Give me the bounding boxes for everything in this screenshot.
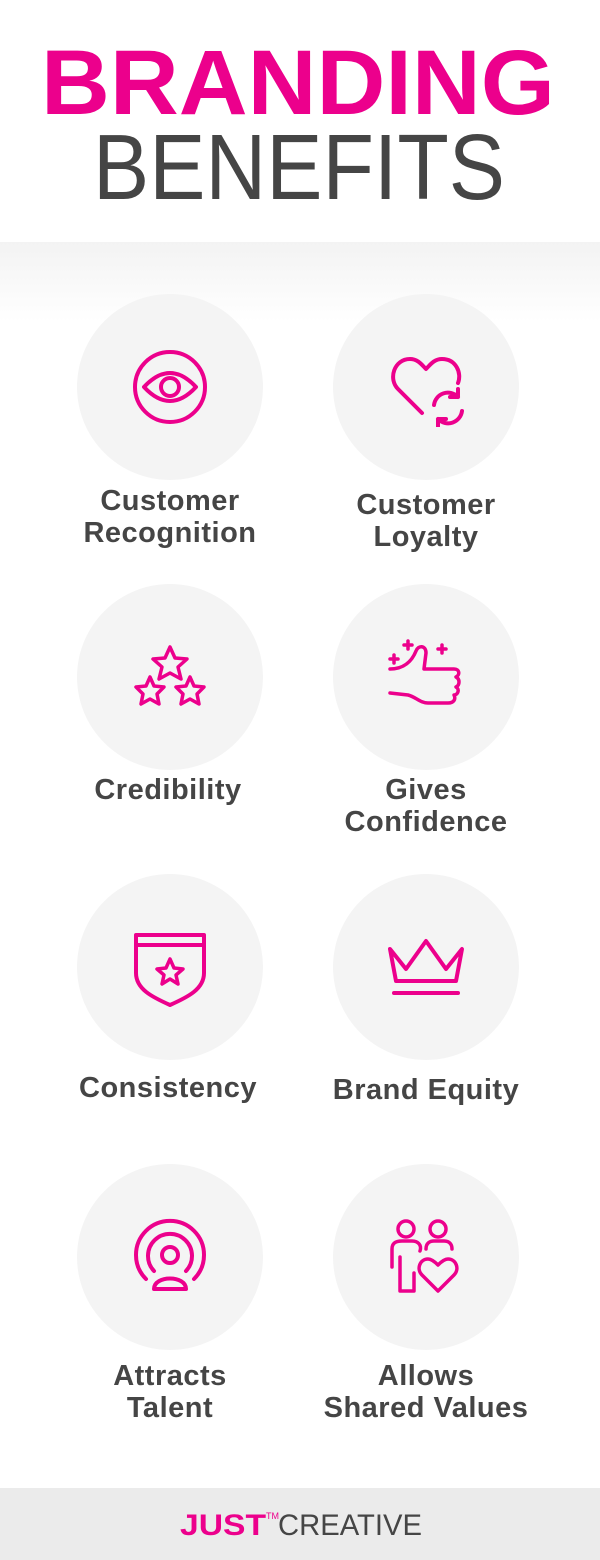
label: customer recognition: Customer [100, 485, 240, 517]
panel: attracts talent [77, 1164, 263, 1350]
panel: allows shared values [333, 1164, 519, 1350]
label: allows shared values [324, 1360, 528, 1424]
label: allows shared values: Shared Values [324, 1392, 528, 1424]
label: gives confidence: Confidence [345, 806, 507, 838]
label: customer recognition [83, 485, 257, 549]
logo [180, 1509, 422, 1542]
panel: customer loyalty [333, 294, 519, 480]
label: brand equity: Brand Equity [333, 1074, 519, 1106]
logo: CREATIVE [278, 1509, 422, 1542]
panel: customer recognition [77, 294, 263, 480]
label: credibility: Credibility [94, 774, 242, 806]
label: attracts talent: Talent [127, 1392, 213, 1424]
label: attracts talent [113, 1360, 227, 1424]
title [41, 32, 555, 215]
label: gives confidence [345, 774, 507, 838]
label: gives confidence: Gives [385, 774, 467, 806]
logo: TM [266, 1511, 279, 1521]
label: consistency: Consistency [79, 1072, 257, 1104]
label: attracts talent: Attracts [113, 1360, 227, 1392]
panel: gives confidence [333, 584, 519, 770]
footer [0, 1488, 600, 1560]
label: customer recognition: Recognition [83, 517, 257, 549]
label: customer loyalty: Customer [356, 489, 496, 521]
panel: consistency [77, 874, 263, 1060]
label: customer loyalty: Loyalty [373, 521, 479, 553]
panel: brand equity [333, 874, 519, 1060]
title: BRANDING [41, 32, 555, 134]
panel: credibility [77, 584, 263, 770]
logo: JUST [180, 1509, 266, 1542]
label: allows shared values: Allows [378, 1360, 474, 1392]
label: customer loyalty [356, 489, 496, 553]
